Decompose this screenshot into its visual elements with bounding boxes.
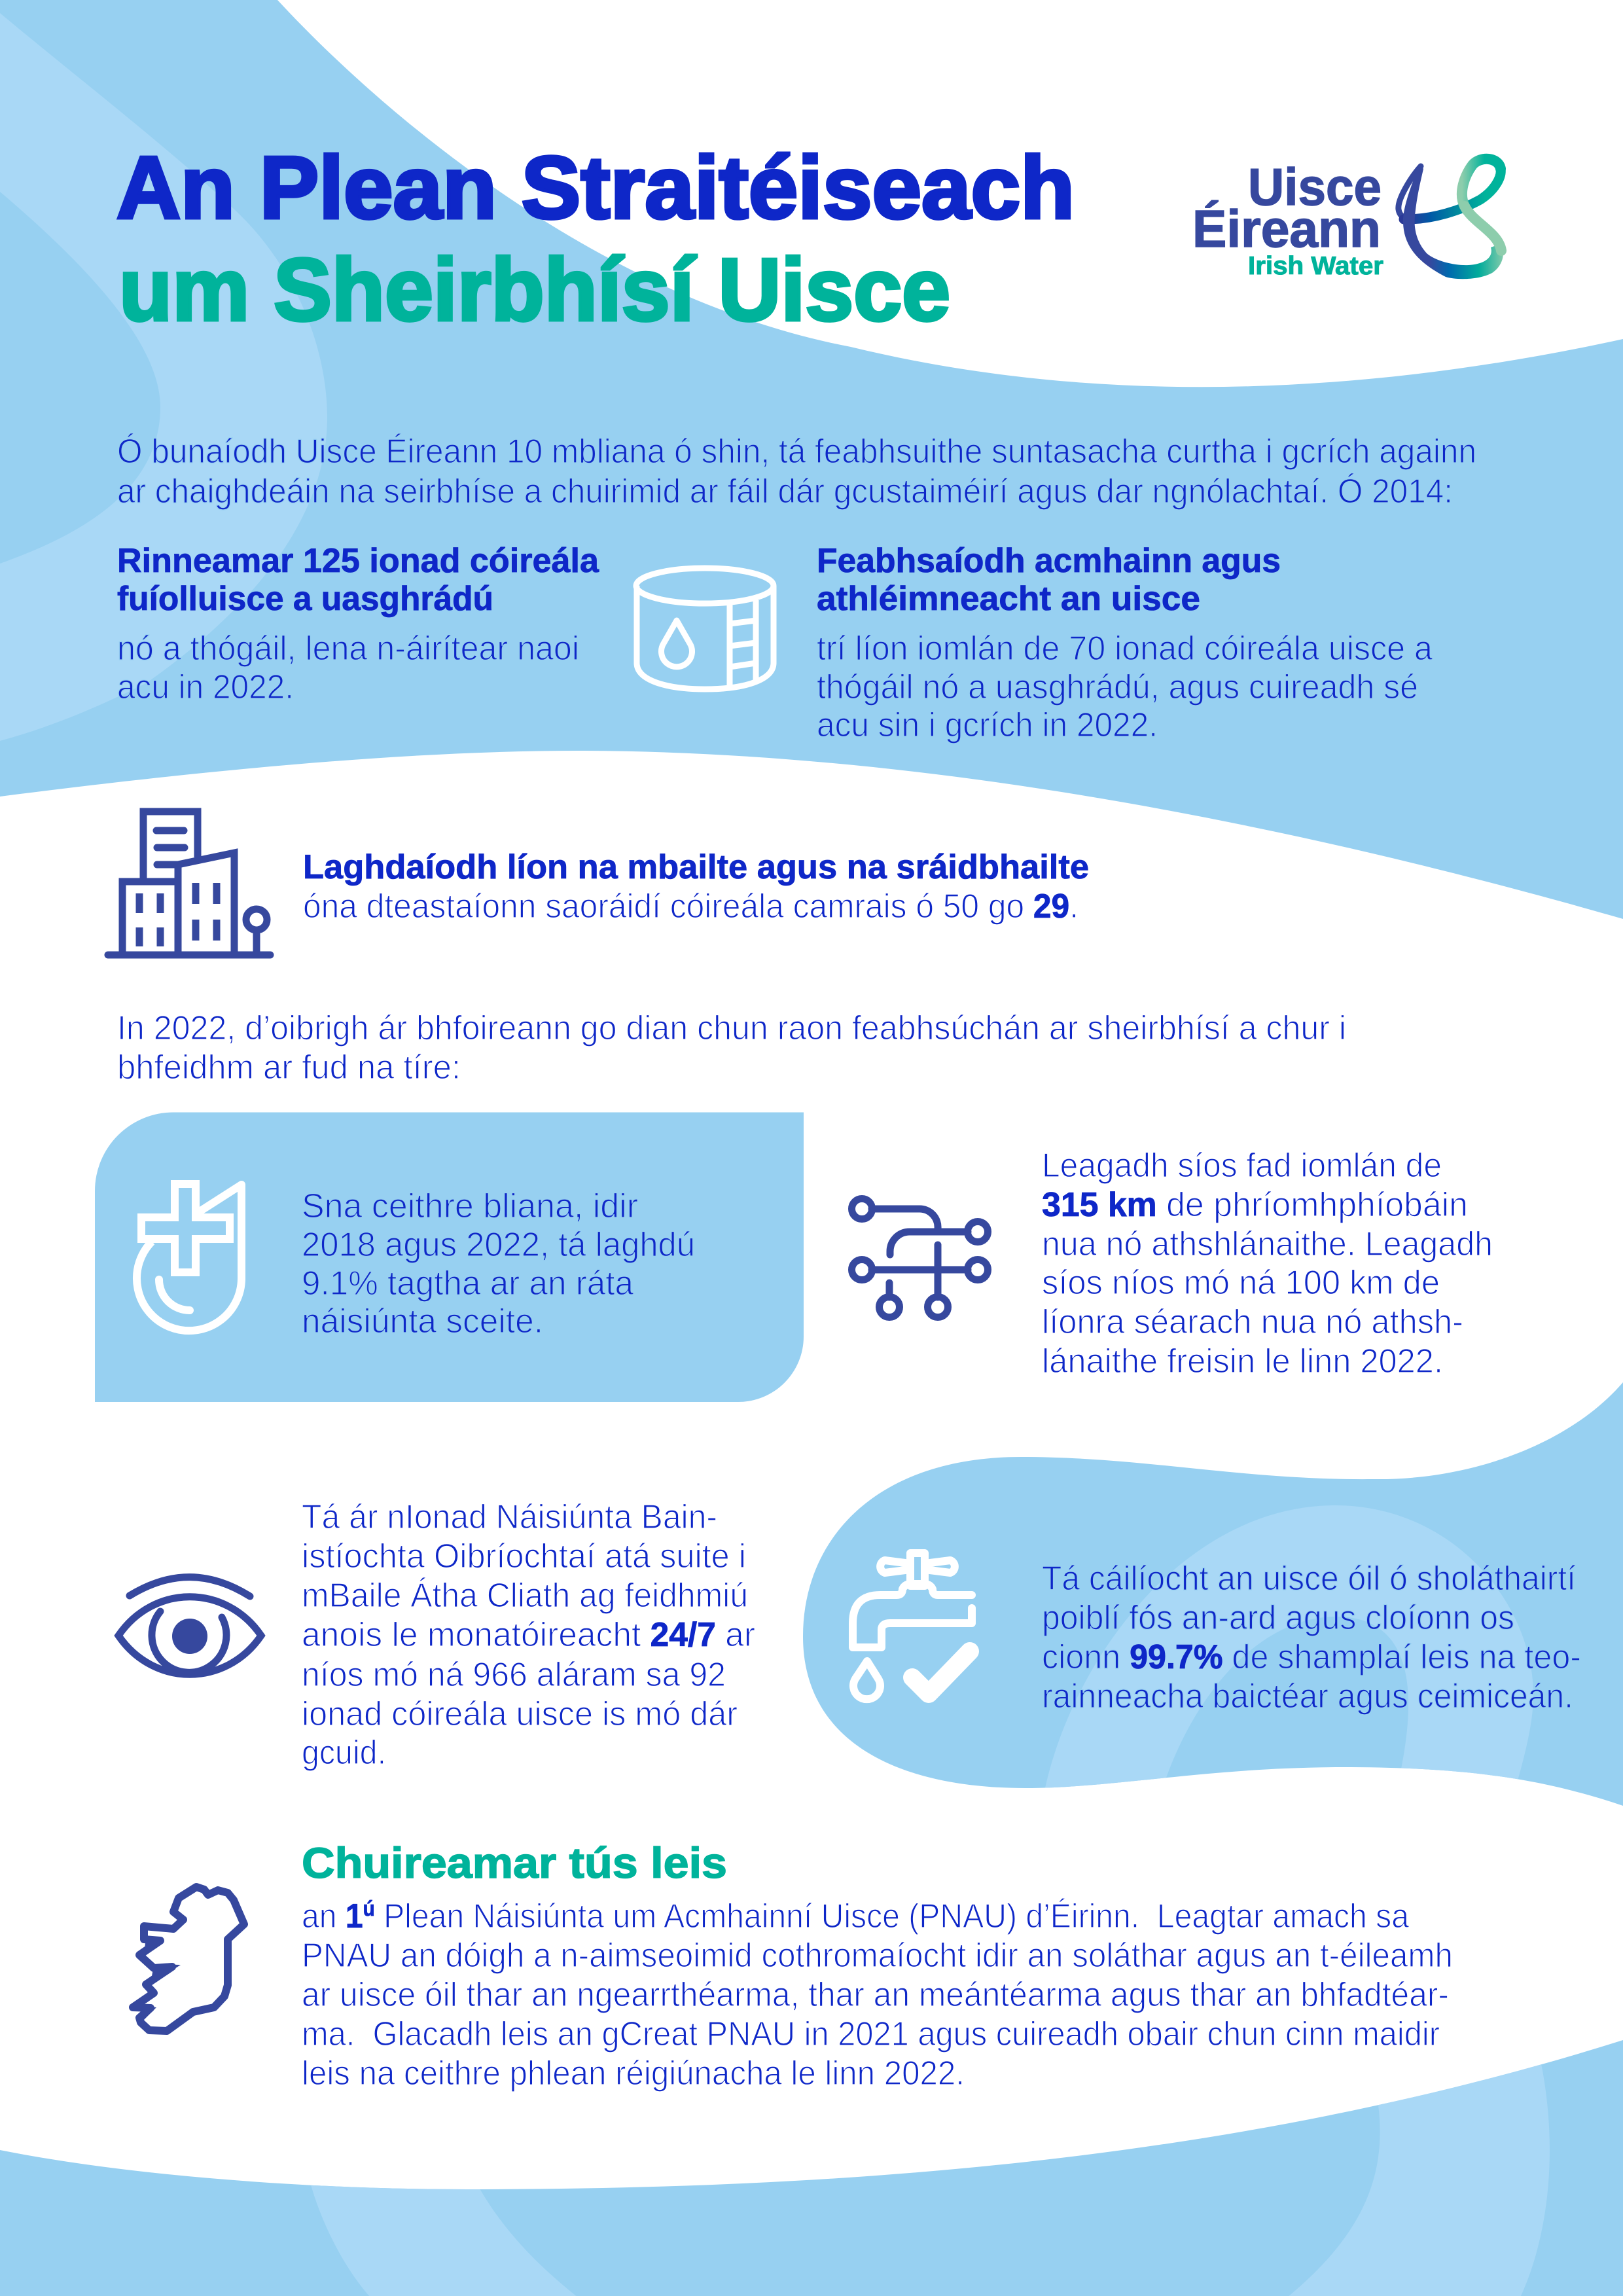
heading: fuíolluisce a uasghrádú — [117, 580, 493, 618]
text block: drinking water quality: poiblí fós an-ard agus cloíonn os — [1042, 1599, 1514, 1637]
panel: water capacity and resilience — [817, 542, 1433, 744]
text block: mains laid: nua nó athshlánaithe. Leagadh — [1042, 1225, 1493, 1263]
title: An Plean Straitéiseach — [116, 138, 1075, 237]
text block: acu in 2022. — [117, 668, 294, 706]
icon: map of Ireland — [133, 1887, 244, 2031]
text block: drinking water quality: Tá cáilíocht an uisce óil ó sholáthairtí — [1042, 1560, 1577, 1598]
text block: acu sin i gcrích in 2022. — [817, 706, 1158, 744]
heading: athléimneacht an uisce — [817, 580, 1200, 618]
icon: water tank — [636, 568, 774, 689]
text block: national operations centre: gcuid. — [302, 1734, 386, 1772]
text block: national water resources plan: ma. Glacadh leis an gCreat PNAU in 2021 agus cuireadh obair chun cinn maidir — [302, 2015, 1440, 2053]
intro paragraph — [117, 433, 1476, 511]
panel: wastewater plants — [117, 542, 599, 706]
background: bottom blue wave — [0, 2040, 1623, 2296]
text block: mains laid — [1042, 1147, 1493, 1380]
icon: pipe network — [852, 1199, 988, 1317]
text block: national water resources plan: Plean Náisiúnta um Acmhainní Uisce (PNAU) d’Éirinn. Leagtar amach sa — [375, 1897, 1409, 1935]
background: middle right blob — [803, 1382, 1623, 1806]
text block: national operations centre: níos mó ná 966 aláram sa 92 — [302, 1656, 726, 1694]
icon: tap with drop and check — [853, 1553, 972, 1699]
text block: Sna ceithre bliana, idir — [302, 1187, 638, 1225]
text block: 2022 intro: bhfeidhm ar fud na tíre: — [117, 1049, 461, 1086]
background: top-left light swirl — [0, 13, 327, 741]
text block: mains laid: lánaithe freisin le linn 2022. — [1042, 1342, 1443, 1380]
text block: national water resources plan: an 1 — [302, 1897, 365, 1935]
text block: náisiúnta sceite. — [302, 1302, 543, 1340]
text block: mains laid: Leagadh síos fad iomlán de — [1042, 1147, 1442, 1185]
text block: mains laid: síos níos mó ná 100 km de — [1042, 1264, 1440, 1302]
text block: 2022 intro: In 2022, d’oibrigh ár bhfoireann go dian chun raon feabhsúchán ar sheirbhísí a chur i — [117, 1009, 1346, 1047]
text block: national water resources plan: PNAU an dóigh a n-aimseoimid cothromaíocht idir an soláthar agus an t-éileamh — [302, 1937, 1453, 1975]
text block: drinking water quality — [1042, 1560, 1581, 1715]
panel background — [95, 1113, 804, 1402]
text block: nó a thógáil, lena n-áirítear naoi — [117, 630, 579, 668]
text block: thógáil nó a uasghrádú, agus cuireadh sé — [817, 668, 1418, 706]
icon: eye — [118, 1577, 261, 1674]
text block: towns and villages: óna dteastaíonn saoráidí cóireála camrais ó 50 go 29. — [303, 888, 1079, 925]
text block: trí líon iomlán de 70 ionad cóireála uisce a — [817, 630, 1433, 668]
text block — [817, 630, 1433, 744]
heading: Rinneamar 125 ionad cóireála — [117, 542, 599, 580]
title — [116, 138, 1075, 339]
text block: national water resources plan: ar uisce óil thar an ngearrthéarma, thar an meántéarma agus thar an bhfadtéar- — [302, 1976, 1449, 2014]
logo wordmark: Irish Water — [1248, 252, 1383, 280]
heading — [817, 542, 1281, 618]
text block: mains laid: líonra séarach nua nó athsh- — [1042, 1303, 1463, 1341]
icon: buildings — [108, 812, 270, 955]
text block: towns and villages: Laghdaíodh líon na mbailte agus na sráidbhailte — [303, 848, 1089, 886]
text block: national water resources plan — [302, 1897, 1453, 2092]
text block: national operations centre — [302, 1498, 755, 1772]
text block: 2018 agus 2022, tá laghdú — [302, 1226, 695, 1264]
text block: 2022 intro — [117, 1009, 1346, 1086]
logo: Uisce Éireann Irish Water — [1192, 158, 1503, 280]
intro paragraph: ar chaighdeáin na seirbhíse a chuirimid ar fáil dár gcustaiméirí agus dar ngnólachtaí. Ó 2014: — [117, 473, 1453, 511]
logo wordmark — [1192, 158, 1383, 280]
title: um Sheirbhísí Uisce — [119, 240, 950, 339]
text block — [117, 630, 579, 706]
logo wordmark: Uisce — [1248, 158, 1382, 216]
text block: national water resources plan: leis na ceithre phlean réigiúnacha le linn 2022. — [302, 2054, 965, 2092]
text block: national water resources plan: ú — [363, 1897, 375, 1920]
text block: 9.1% tagtha ar an ráta — [302, 1265, 633, 1302]
text block: national operations centre: istíochta Oibríochtaí atá suite i — [302, 1537, 746, 1575]
text block: drinking water quality: cionn 99.7% de shamplaí leis na teo- — [1042, 1638, 1581, 1676]
background: bottom light swirls — [308, 2049, 1550, 2296]
background: blob light swirl — [1041, 1505, 1533, 1813]
heading: Chuireamar tús leis: Chuireamar tús leis — [302, 1839, 727, 1887]
text block: towns and villages — [303, 848, 1089, 925]
panel: leakage rate — [95, 1113, 804, 1402]
heading: Feabhsaíodh acmhainn agus — [817, 542, 1281, 580]
intro paragraph: Ó bunaíodh Uisce Éireann 10 mbliana ó shin, tá feabhsuithe suntasacha curtha i gcrích againn — [117, 433, 1476, 471]
logo swoosh — [1399, 159, 1503, 279]
logo wordmark: Éireann — [1192, 200, 1381, 258]
heading — [117, 542, 599, 618]
text block: drinking water quality: rainneacha baictéar agus ceimiceán. — [1042, 1677, 1573, 1715]
background: top blue wave — [0, 0, 1623, 919]
text block: national operations centre: mBaile Átha Cliath ag feidhmiú — [302, 1577, 748, 1615]
text block: national operations centre: ionad cóireála uisce is mó dár — [302, 1695, 738, 1733]
text block: national operations centre: Tá ár nIonad Náisiúnta Bain- — [302, 1498, 717, 1536]
text block — [302, 1187, 695, 1340]
text block: mains laid: 315 km de phríomhphíobáin — [1042, 1186, 1468, 1224]
text block: national operations centre: anois le monatóireacht 24/7 ar — [302, 1616, 755, 1654]
icon: cross and drop — [137, 1184, 241, 1331]
